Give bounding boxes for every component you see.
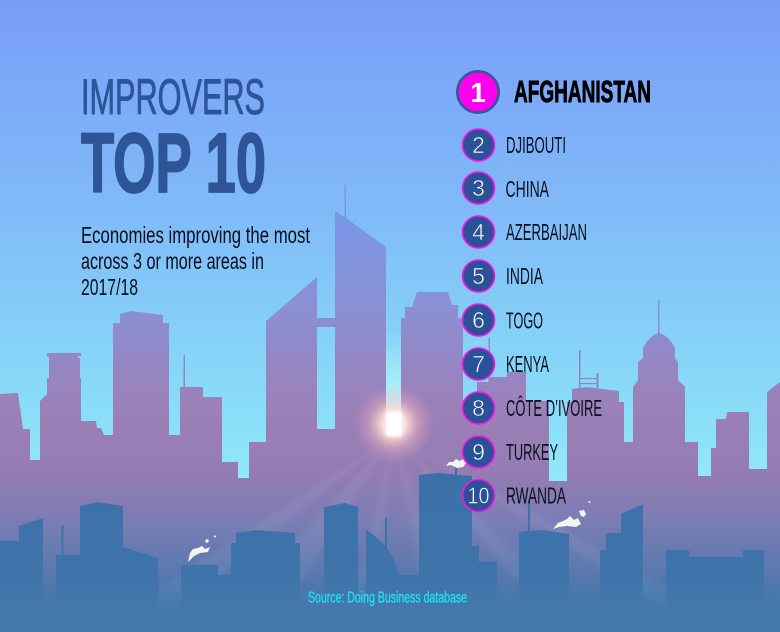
subtitle: across 3 or more areas in	[81, 248, 264, 274]
rank 7: Kenya: 7	[472, 351, 485, 377]
title	[81, 69, 266, 210]
rank 9: Turkey: 9	[472, 439, 485, 465]
ranking list	[457, 71, 651, 512]
rank 4: Azerbaijan	[462, 216, 587, 248]
rank 8: Cote d'Ivoire: 8	[472, 395, 485, 421]
subtitle	[81, 222, 310, 300]
white birds left	[188, 536, 216, 562]
rank 8: Cote d'Ivoire	[462, 392, 602, 424]
light shaft above sun	[386, 330, 401, 420]
rank 8: Cote d'Ivoire: CÔTE D’IVOIRE	[506, 394, 602, 421]
back skyline	[0, 185, 780, 632]
rank 3: China: CHINA	[506, 176, 549, 202]
rank 7: Kenya	[462, 348, 549, 380]
light rays	[179, 561, 646, 580]
rank 6: Togo: TOGO	[506, 308, 543, 334]
ground fade	[0, 575, 780, 632]
rank 6: Togo: 6	[472, 307, 485, 333]
rank 2: Djibouti	[462, 129, 566, 161]
rank 2: Djibouti: 2	[472, 132, 485, 158]
rank 9: Turkey	[462, 436, 558, 468]
rank 3: China: 3	[472, 175, 485, 201]
rank 4: Azerbaijan: 4	[472, 219, 485, 245]
rank 1: Afghanistan	[457, 71, 651, 113]
rank 5: India	[462, 260, 543, 292]
rank 2: Djibouti: DJIBOUTI	[506, 132, 566, 158]
rank 1: Afghanistan: 1	[470, 77, 486, 108]
source note: Source: Doing Business database	[308, 590, 467, 606]
front skyline	[0, 460, 764, 632]
rank 9: Turkey: TURKEY	[506, 439, 558, 465]
rank 3: China	[462, 172, 549, 204]
white birds right	[553, 501, 590, 529]
rank 1: Afghanistan: AFGHANISTAN	[514, 74, 651, 109]
white birds centre	[446, 459, 466, 468]
rank 4: Azerbaijan: AZERBAIJAN	[506, 219, 587, 245]
rank 5: India: INDIA	[506, 263, 543, 289]
rank 7: Kenya: KENYA	[506, 351, 549, 377]
title: TOP 10	[81, 116, 266, 210]
rank 10: Rwanda: 10	[468, 482, 490, 508]
subtitle: Economies improving the most	[81, 222, 310, 248]
subtitle: 2017/18	[81, 274, 138, 300]
rank 5: India: 5	[472, 263, 485, 289]
title: IMPROVERS	[81, 69, 265, 125]
rank 10: Rwanda: RWANDA	[506, 482, 566, 508]
rooftop antenna frame	[579, 350, 598, 389]
rank 6: Togo	[462, 304, 543, 336]
sun	[354, 384, 434, 464]
rank 10: Rwanda	[462, 480, 566, 512]
